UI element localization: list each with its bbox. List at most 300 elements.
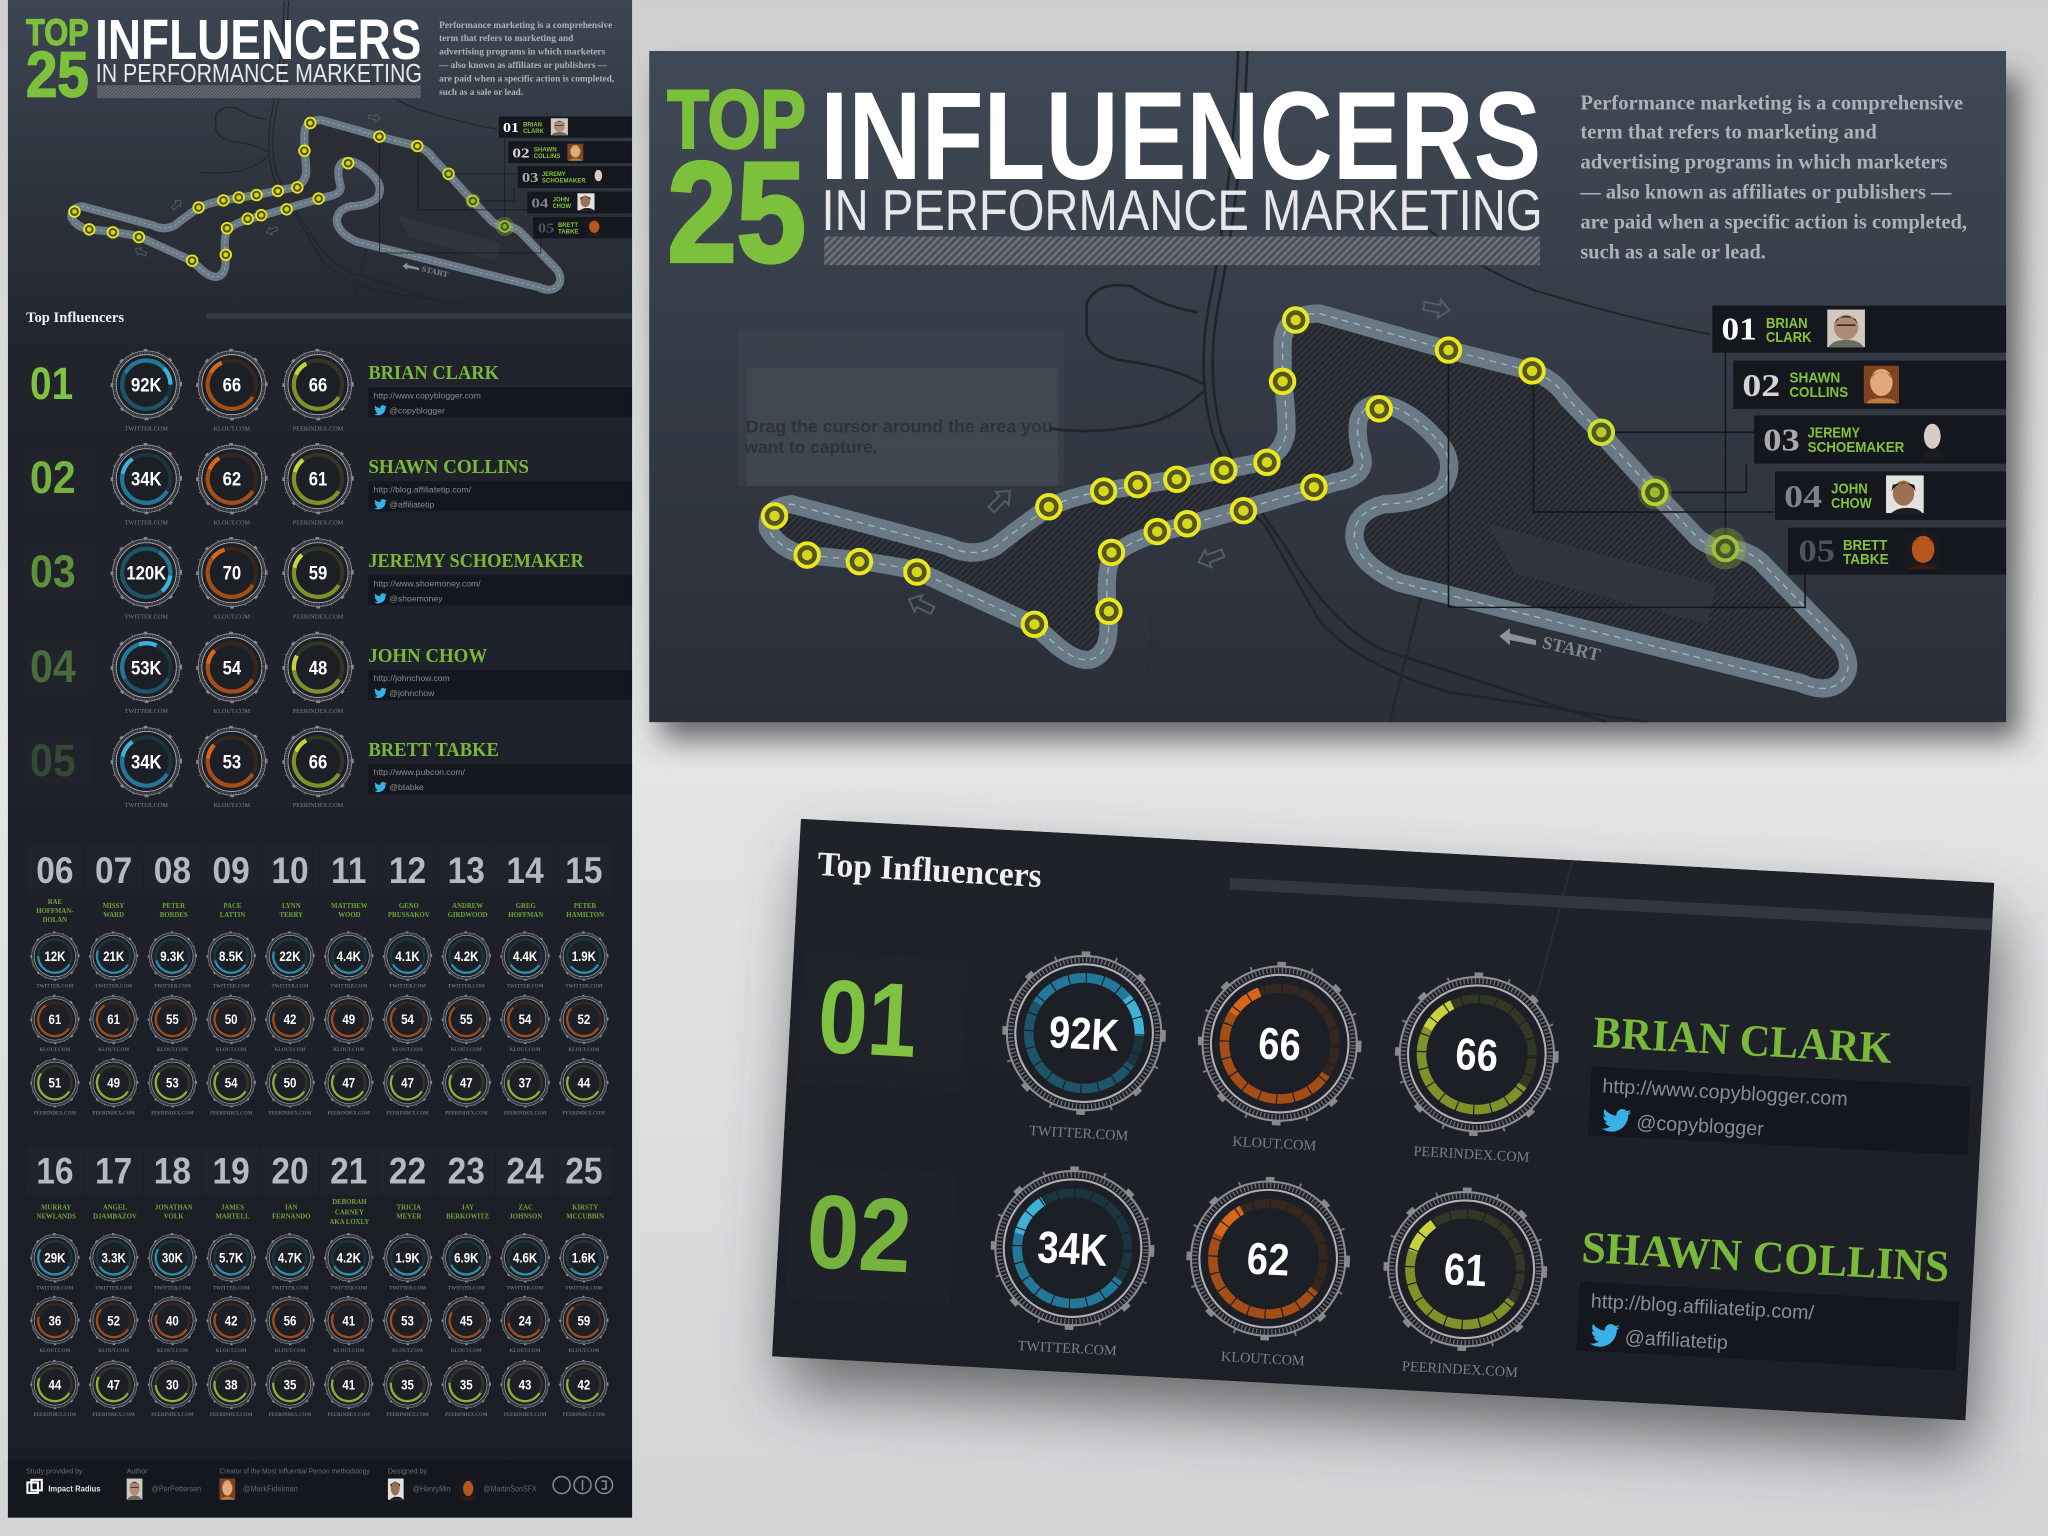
- rank 25: KIRSTY: [572, 1204, 598, 1211]
- gauge: klout: KLOUT.COM: [216, 1048, 247, 1053]
- gauge: peerindex: [283, 350, 353, 432]
- gauge: twitter: [112, 633, 181, 715]
- rank 09: LATTIN: [220, 912, 245, 919]
- icon: impact radius logo: [27, 1480, 42, 1493]
- gauge: peerindex: [1392, 970, 1561, 1167]
- gauge: klout: 70: [223, 562, 241, 584]
- title: INFLUENCERS: [95, 9, 421, 72]
- top five legend labels: 01: [1721, 312, 1757, 347]
- footer credits: @MarkFidelman: [243, 1485, 298, 1494]
- ghost capture window: [738, 330, 1064, 486]
- top five legend labels: CLARK: [523, 128, 544, 135]
- gauge: klout: KLOUT.COM: [510, 1048, 541, 1053]
- gauge: twitter: [90, 1234, 138, 1291]
- footer credits: @HenryMin: [413, 1485, 451, 1494]
- gauge: twitter: 21K: [103, 949, 124, 964]
- top five legend labels: 02: [1742, 368, 1780, 403]
- gauge: klout: KLOUT.COM: [214, 802, 251, 809]
- gauge: peerindex: 42: [577, 1377, 590, 1392]
- title: INFLUENCERS: [820, 65, 1541, 206]
- gauge: twitter: [501, 1234, 549, 1291]
- rank 21: CARNEY: [335, 1210, 364, 1217]
- gauge: twitter: [112, 350, 181, 432]
- gauge: klout: KLOUT.COM: [451, 1048, 482, 1053]
- gauge: klout: KLOUT.COM: [392, 1048, 423, 1053]
- gauge: peerindex: 43: [519, 1377, 531, 1392]
- gauge: klout: 52: [107, 1313, 120, 1328]
- rank 18: VOLK: [164, 1214, 184, 1221]
- gauge: twitter: TWITTER.COM: [125, 613, 168, 620]
- influencer row 02: @affiliatetip: [1624, 1327, 1728, 1354]
- gauge: peerindex: PEERINDEX.COM: [293, 802, 344, 809]
- influencer row 04: [24, 633, 632, 715]
- gauge: peerindex: [266, 1361, 314, 1418]
- gauge: peerindex: [207, 1361, 255, 1418]
- rank 22: TRICIA: [397, 1204, 421, 1211]
- rank 07: 07: [95, 849, 132, 891]
- gauge: twitter: TWITTER.COM: [213, 985, 250, 990]
- gauge: peerindex: PEERINDEX.COM: [445, 1111, 488, 1116]
- gauge: peerindex: PEERINDEX.COM: [269, 1111, 311, 1116]
- gauge: peerindex: PEERINDEX.COM: [445, 1413, 488, 1418]
- footer credits: @MartinSonSFX: [483, 1485, 538, 1494]
- gauge: peerindex: 61: [1443, 1243, 1488, 1296]
- rank 16: MURRAY: [41, 1204, 71, 1211]
- influencer row 02: SHAWN COLLINS: [368, 457, 529, 478]
- gauge: klout: 41: [342, 1313, 355, 1328]
- gauge: twitter: TWITTER.COM: [389, 1286, 426, 1291]
- intro paragraph: — also known as affiliates or publishers —: [1579, 180, 1952, 204]
- influencer row 01: @copyblogger: [1636, 1112, 1765, 1140]
- gauge: twitter: 4.7K: [278, 1251, 302, 1266]
- gauge: twitter: 22K: [279, 949, 300, 964]
- gauge: twitter: 92K: [1048, 1006, 1120, 1061]
- influencer row 05: BRETT TABKE: [368, 740, 499, 761]
- icon: twitter bird: [1602, 1108, 1631, 1133]
- rank 21: 21: [330, 1150, 367, 1192]
- gauge: peerindex: [207, 1059, 255, 1116]
- intro paragraph: term that refers to marketing and: [1580, 119, 1877, 143]
- rank 09: 09: [213, 849, 250, 891]
- rank 17: ANGEL: [103, 1204, 127, 1211]
- gauge: twitter: [31, 1234, 79, 1291]
- gauge: twitter: TWITTER.COM: [154, 1286, 191, 1291]
- icon: twitter bird: [374, 782, 387, 792]
- gauge: klout: KLOUT.COM: [214, 519, 251, 526]
- ghost capture window: want to capture.: [744, 437, 878, 457]
- rank 20: IAN: [285, 1204, 298, 1211]
- panel: zoomed racetrack map: [649, 51, 2006, 722]
- gauge: twitter: TWITTER.COM: [565, 985, 603, 990]
- gauge: twitter: [112, 444, 181, 526]
- gauge: klout: [197, 350, 267, 432]
- gauge: twitter: [148, 932, 196, 990]
- gauge: klout: KLOUT.COM: [392, 1349, 423, 1354]
- gauge: twitter: 4.2K: [337, 1251, 361, 1266]
- influencer row 04: JOHN CHOW: [368, 646, 488, 667]
- rank 24: JOHNSON: [509, 1214, 542, 1221]
- rank 22: 22: [389, 1150, 426, 1192]
- icon: twitter bird: [374, 688, 387, 698]
- intro paragraph: [1579, 91, 1967, 264]
- influencer row 01: http://www.copyblogger.com: [374, 390, 481, 400]
- influencer row 01: http://www.copyblogger.com: [1602, 1075, 1848, 1111]
- gauge: klout: KLOUT.COM: [333, 1349, 364, 1354]
- gauge: peerindex: 37: [519, 1076, 531, 1091]
- intro paragraph: are paid when a specific action is completed,: [439, 74, 615, 85]
- gauge: klout: [501, 995, 549, 1053]
- title: 25: [667, 133, 806, 292]
- gauge: klout: KLOUT.COM: [98, 1349, 129, 1354]
- gauge: peerindex: [90, 1361, 138, 1418]
- gauge: klout: 40: [166, 1313, 179, 1328]
- gauge: klout: 54: [401, 1012, 414, 1027]
- gauge: klout: KLOUT.COM: [214, 708, 251, 715]
- gauge: klout: [442, 995, 490, 1053]
- gauge: klout: KLOUT.COM: [333, 1048, 364, 1053]
- gauge: peerindex: PEERINDEX.COM: [386, 1111, 429, 1116]
- gauge: twitter: TWITTER.COM: [330, 1286, 368, 1291]
- gauge: twitter: TWITTER.COM: [565, 1286, 603, 1291]
- gauge: klout: [442, 1297, 490, 1354]
- rank 25: [555, 1147, 613, 1418]
- title: [667, 65, 1543, 292]
- heading: top influencers: Top Influencers: [817, 845, 1043, 895]
- gauge: peerindex: [266, 1059, 314, 1116]
- top five legend labels: 05: [538, 220, 554, 236]
- top five legend labels: JEREMY: [542, 171, 566, 178]
- gauge: peerindex: PEERINDEX.COM: [293, 708, 344, 715]
- gauge: twitter: 30K: [162, 1251, 183, 1266]
- rank 13: GIRDWOOD: [448, 912, 488, 919]
- rank 06: HOFFMAN-: [36, 908, 74, 915]
- rank 07: [85, 846, 142, 1116]
- footer credits: Impact Radius: [48, 1485, 101, 1494]
- rank 19: 19: [213, 1150, 250, 1192]
- gauge: peerindex: [560, 1361, 608, 1418]
- rank 23: [438, 1147, 495, 1418]
- gauge: klout: 52: [577, 1012, 590, 1027]
- gauge: peerindex: [442, 1059, 490, 1116]
- gauge: peerindex: [560, 1059, 608, 1116]
- gauge: twitter: 4.4K: [337, 949, 361, 964]
- rank 09: PACE: [224, 903, 242, 910]
- photo: author: [127, 1479, 142, 1500]
- gauge: peerindex: PEERINDEX.COM: [328, 1111, 370, 1116]
- track START label: START: [421, 265, 449, 279]
- gauge: peerindex: [325, 1361, 373, 1418]
- gauge: peerindex: 66: [1454, 1028, 1499, 1081]
- rank 21: [320, 1147, 377, 1418]
- title: IN PERFORMANCE MARKETING: [96, 58, 422, 88]
- gauge: klout: 53: [223, 751, 241, 773]
- gauge: klout: 53: [401, 1313, 414, 1328]
- rank 17: DJAMBAZOV: [93, 1214, 137, 1221]
- gauge: klout: 24: [519, 1313, 531, 1328]
- header art: racetrack map with influencer markers: [69, 1, 632, 305]
- footer credits: @PerPettersen: [152, 1485, 201, 1494]
- heading: top influencers: [817, 845, 1995, 946]
- gauge: klout: [501, 1297, 549, 1354]
- rank 18: JONATHAN: [155, 1204, 193, 1211]
- rank 10: LYNN: [282, 903, 301, 910]
- gauge: peerindex: PEERINDEX.COM: [293, 425, 344, 432]
- influencer row 04: @johnchow: [389, 688, 435, 698]
- gauge: twitter: [266, 932, 314, 990]
- rank 20: 20: [271, 1150, 309, 1192]
- gauge: klout: [197, 538, 267, 620]
- gauge: klout: [31, 995, 79, 1053]
- gauge: twitter: [207, 1234, 255, 1291]
- gauge: klout: [90, 1297, 138, 1354]
- gauge: peerindex: 53: [166, 1076, 179, 1091]
- gauge: peerindex: [1380, 1186, 1549, 1382]
- rank 15: HAMILTON: [566, 912, 604, 919]
- gauge: klout: [384, 995, 431, 1053]
- gauge: peerindex: [31, 1361, 79, 1418]
- gauge: peerindex: PEERINDEX.COM: [92, 1413, 135, 1418]
- rank 10: [261, 846, 319, 1116]
- gauge: twitter: [266, 1234, 314, 1291]
- rank 14: [496, 846, 554, 1116]
- gauge: twitter: [207, 932, 255, 990]
- gauge: twitter: 120K: [126, 562, 166, 584]
- gauge: klout: [266, 1297, 314, 1354]
- gauge: peerindex: [31, 1059, 79, 1116]
- gauge: twitter: 1.6K: [572, 1251, 596, 1266]
- icon: twitter bird: [374, 593, 387, 603]
- gauge: peerindex: PEERINDEX.COM: [386, 1413, 429, 1418]
- footer credits: Study provided by: [26, 1468, 83, 1475]
- influencer row 01: 01: [815, 958, 920, 1080]
- gauge: klout: [1183, 1175, 1352, 1371]
- gauge: twitter: 29K: [44, 1251, 65, 1266]
- rank 22: MEYER: [396, 1214, 422, 1221]
- footer credits: Author: [127, 1468, 148, 1475]
- track START label: START: [1540, 632, 1602, 665]
- gauge: twitter: 12K: [44, 949, 65, 964]
- rank 11: MATTHEW: [331, 903, 368, 910]
- top five legend labels: 05: [1799, 534, 1835, 569]
- gauge: peerindex: PEERINDEX.COM: [92, 1111, 135, 1116]
- top five legend labels: 01: [503, 120, 519, 136]
- rank 25: 25: [565, 1150, 602, 1192]
- top five legend labels: BRETT: [558, 222, 579, 229]
- gauge: twitter: 3.3K: [102, 1251, 126, 1266]
- gauge: peerindex: [325, 1059, 373, 1116]
- photo: creator: [219, 1479, 235, 1500]
- gauge: peerindex: PEERINDEX.COM: [34, 1413, 76, 1418]
- top five legend labels: SCHOEMAKER: [542, 178, 586, 185]
- rank 14: 14: [506, 849, 544, 891]
- influencer row 02: 02: [30, 452, 76, 503]
- gauge: twitter: 9.3K: [160, 949, 185, 964]
- gauge: klout: 55: [460, 1012, 473, 1027]
- gauge: peerindex: 35: [284, 1377, 296, 1392]
- gauge: klout: KLOUT.COM: [216, 1349, 247, 1354]
- top five legend labels: 03: [1763, 423, 1800, 458]
- influencer row 03: [24, 538, 632, 620]
- influencer row 02: SHAWN COLLINS: [1580, 1222, 1951, 1292]
- rank 14: HOFFMAN: [508, 912, 543, 919]
- rank 12: 12: [389, 849, 426, 891]
- ghost capture window: Snipping Tool: [771, 341, 865, 357]
- footer credits: [8, 1460, 632, 1518]
- gauge: twitter: 8.5K: [219, 949, 243, 964]
- gauge: twitter: [112, 727, 181, 809]
- gauge: klout: KLOUT.COM: [510, 1349, 541, 1354]
- rank 06: [26, 846, 84, 1116]
- gauge: peerindex: 61: [309, 468, 327, 490]
- influencer row 01: [24, 350, 632, 432]
- influencer row 05: http://www.pubcon.com/: [374, 767, 466, 777]
- icon: twitter bird: [1590, 1323, 1620, 1348]
- top five legend labels: 04: [1784, 479, 1822, 514]
- gauge: peerindex: [384, 1361, 431, 1418]
- gauge: twitter: TWITTER.COM: [95, 1286, 132, 1291]
- top five legend labels: CHOW: [553, 203, 571, 210]
- footer credits: Designed by: [388, 1468, 428, 1475]
- gauge: peerindex: [90, 1059, 138, 1116]
- gauge: twitter: 1.9K: [572, 949, 596, 964]
- gauge: peerindex: [501, 1361, 549, 1418]
- rank 16: [26, 1147, 84, 1418]
- footer credits: Creator of the Most Influential Person methodology: [219, 1468, 370, 1475]
- gauge: peerindex: [283, 444, 353, 526]
- rank 23: 23: [448, 1150, 485, 1192]
- gauge: klout: 42: [225, 1313, 238, 1328]
- top five legend labels: [503, 120, 586, 236]
- gauge: peerindex: [501, 1059, 549, 1116]
- top five legend labels: BRIAN: [1766, 315, 1808, 332]
- gauge: klout: KLOUT.COM: [275, 1349, 306, 1354]
- rank 06: RAE: [48, 899, 62, 906]
- intro paragraph: [438, 20, 615, 98]
- gauge: twitter: [442, 932, 490, 990]
- rank 13: 13: [448, 849, 485, 891]
- gauge: peerindex: 66: [309, 751, 327, 773]
- icon: twitter bird: [374, 405, 387, 415]
- rank 06: DOLAN: [43, 917, 67, 924]
- influencer row 02: http://blog.affiliatetip.com/: [1590, 1290, 1815, 1324]
- gauge: peerindex: 44: [577, 1076, 590, 1091]
- gauge: klout: 36: [48, 1313, 61, 1328]
- gauge: twitter: TWITTER.COM: [95, 985, 132, 990]
- influencer row 01: BRIAN CLARK: [1592, 1007, 1893, 1073]
- gauge: klout: [197, 727, 267, 809]
- rank 18: [144, 1147, 201, 1418]
- gauge: klout: 61: [107, 1012, 120, 1027]
- rank 07: MISSY: [103, 903, 124, 910]
- gauge: klout: 66: [1257, 1017, 1302, 1070]
- gauge: peerindex: 49: [107, 1076, 120, 1091]
- gauge: twitter: [31, 932, 79, 990]
- influencer row 02: http://blog.affiliatetip.com/: [374, 484, 472, 494]
- gauge: klout: [148, 1297, 196, 1354]
- gauge: twitter: [987, 1164, 1156, 1361]
- top five legend labels: BRETT: [1843, 537, 1888, 554]
- gauge: peerindex: PEERINDEX.COM: [1413, 1144, 1530, 1166]
- gauge: klout: 42: [284, 1012, 296, 1027]
- gauge: twitter: TWITTER.COM: [389, 985, 426, 990]
- gauge: peerindex: PEERINDEX.COM: [563, 1111, 605, 1116]
- top five legend labels: COLLINS: [534, 153, 561, 160]
- intro paragraph: — also known as affiliates or publishers —: [438, 60, 607, 71]
- rank 11: [320, 846, 377, 1116]
- rank 16: 16: [36, 1150, 73, 1192]
- gauge: peerindex: 41: [342, 1377, 355, 1392]
- rank 24: [496, 1147, 554, 1418]
- rank 16: NEWLANDS: [37, 1214, 76, 1221]
- rank 10: 10: [271, 849, 309, 891]
- gauge: klout: KLOUT.COM: [1232, 1134, 1317, 1154]
- gauge: klout: 50: [225, 1012, 238, 1027]
- gauge: twitter: [384, 932, 431, 990]
- influencer row 03: JEREMY SCHOEMAKER: [368, 551, 585, 572]
- rank 17: 17: [95, 1150, 132, 1192]
- top five legend labels: BRIAN: [523, 122, 542, 129]
- gauge: peerindex: 48: [309, 657, 327, 679]
- gauge: klout: [560, 995, 608, 1053]
- gauge: klout: [148, 995, 196, 1053]
- gauge: klout: KLOUT.COM: [157, 1048, 188, 1053]
- rank 20: [261, 1147, 319, 1418]
- influencer row 03: http://www.shoemoney.com/: [374, 578, 481, 588]
- gauge: twitter: [999, 949, 1168, 1146]
- rank 19: MARTELL: [215, 1214, 250, 1221]
- title: 25: [26, 38, 89, 110]
- gauge: peerindex: 44: [48, 1377, 61, 1392]
- gauge: klout: 56: [284, 1313, 296, 1328]
- rank 09: [202, 846, 260, 1116]
- top five legend labels: CLARK: [1766, 329, 1812, 346]
- influencer row 02: [783, 1154, 1964, 1404]
- rank 15: PETER: [574, 903, 597, 910]
- icon: creative commons badges: [553, 1477, 613, 1494]
- gauge: twitter: TWITTER.COM: [125, 425, 168, 432]
- gauge: klout: [197, 444, 267, 526]
- top five legend labels: 04: [531, 196, 548, 212]
- gauge: twitter: TWITTER.COM: [330, 985, 368, 990]
- gauge: peerindex: PEERINDEX.COM: [328, 1413, 370, 1418]
- gauge: peerindex: 51: [48, 1076, 61, 1091]
- gauge: twitter: 34K: [131, 468, 162, 490]
- gauge: klout: 49: [342, 1012, 355, 1027]
- gauge: klout: 54: [223, 657, 242, 679]
- influencer row 02: [24, 444, 632, 526]
- intro paragraph: are paid when a specific action is completed,: [1580, 210, 1967, 234]
- gauge: twitter: 4.1K: [395, 949, 420, 964]
- rank 11: WOOD: [338, 912, 361, 919]
- gauge: klout: KLOUT.COM: [568, 1048, 600, 1053]
- gauge: peerindex: 47: [460, 1076, 473, 1091]
- gauge: klout: 54: [519, 1012, 531, 1027]
- gauge: peerindex: 47: [342, 1076, 355, 1091]
- gauge: klout: 62: [1246, 1232, 1291, 1285]
- gauge: twitter: TWITTER.COM: [125, 802, 168, 809]
- gauge: peerindex: PEERINDEX.COM: [504, 1413, 547, 1418]
- gauge: peerindex: PEERINDEX.COM: [151, 1413, 194, 1418]
- title: [26, 18, 421, 98]
- gauge: klout: KLOUT.COM: [157, 1349, 188, 1354]
- intro paragraph: Performance marketing is a comprehensive: [1580, 91, 1963, 115]
- gauge: klout: KLOUT.COM: [568, 1349, 600, 1354]
- gauge: klout: [266, 995, 314, 1053]
- influencer row 05: 05: [30, 735, 76, 786]
- top five legend labels: TABKE: [558, 229, 579, 236]
- rank 08: PETER: [162, 903, 185, 910]
- heading: top influencers: [26, 312, 632, 325]
